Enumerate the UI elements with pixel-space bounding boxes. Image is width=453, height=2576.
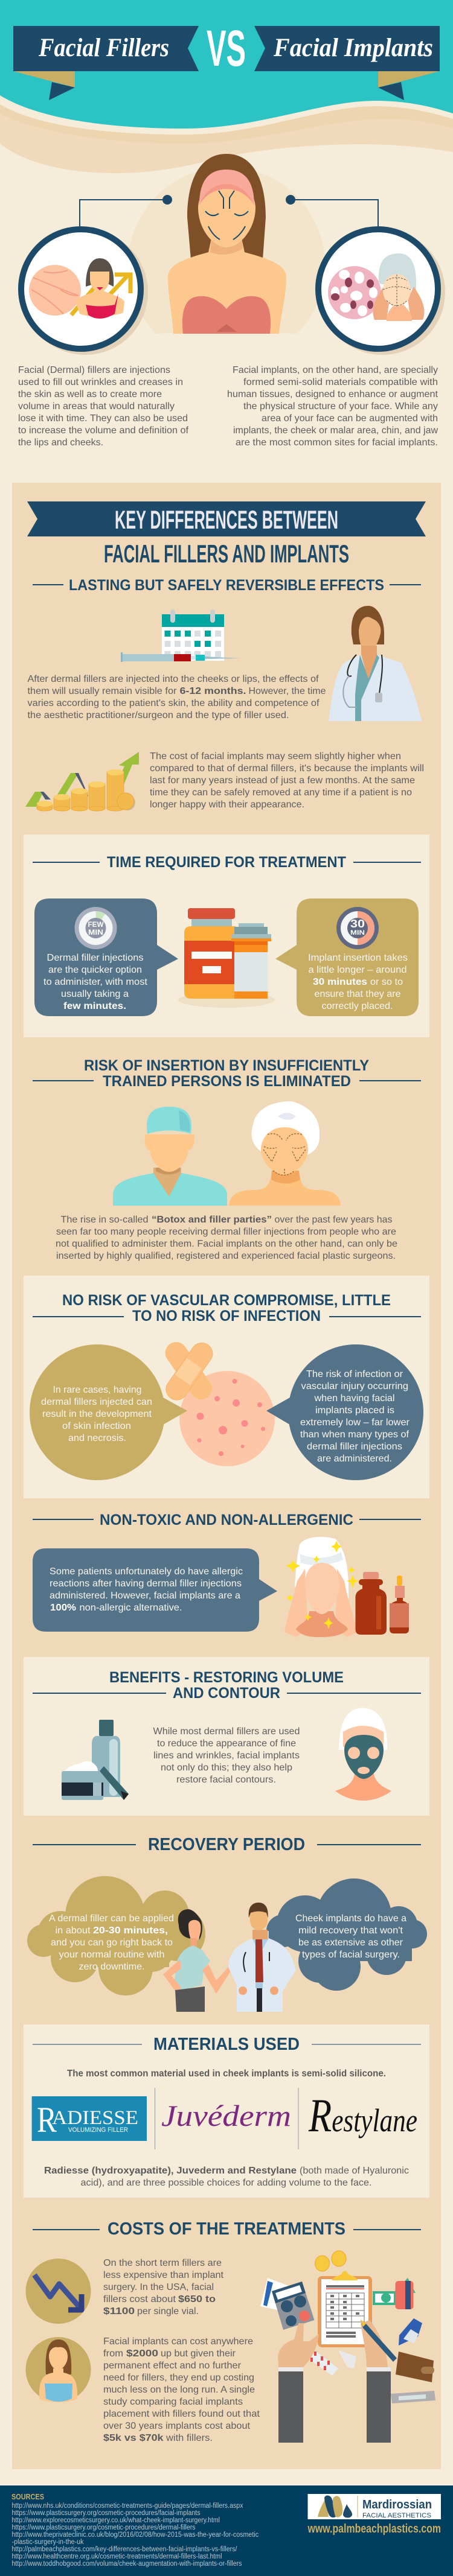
sources [11,2492,259,2568]
bubble: filler time: few minutes. [63,1001,126,1011]
illustration: surgeon [113,1107,227,1206]
heading: no risk: TO NO RISK OF INFECTION [132,1308,321,1325]
text: filler cost: surgery. In the USA, facial [103,2282,214,2292]
text: implant cost details: from [103,2349,123,2359]
icon: woman portrait [25,2337,91,2402]
sources: https://www.plasticsurgery.org/cosmetic-procedures/dermal-fillers [12,2524,196,2531]
text: facial fillers intro: the skin as well as to create more [18,389,162,399]
text: facial implants intro: formed semi-solid materials compatible with [243,377,438,387]
logo: mardirossian: Mardirossian [362,2498,432,2511]
cloud: filler recovery: zero downtime. [79,1962,145,1972]
bubble: implant infection risk: extremely low – far lower [300,1417,410,1428]
bubble: implant time: ensure that they are [314,989,401,999]
heading: non-toxic: NON-TOXIC AND NON-ALLERGENIC [100,1512,353,1528]
bubble: filler infection risk: result in the development [42,1409,152,1419]
text: benefits body: lines and wrinkles, facial implants [153,1751,300,1761]
bubble: implant infection risk: when having facial [313,1393,395,1404]
bubble: allergic reactions: reactions after having dermal filler injections [50,1579,242,1589]
banner: facial fillers [13,26,199,100]
icon: 30 min clock [336,907,379,949]
icon: syringe [121,652,240,662]
text: filler cost: $650 to [178,2294,216,2304]
logo: juvederm: Juvéderm [161,2099,291,2132]
text: implant cost details: $2000 [126,2349,158,2359]
cloud: filler recovery [27,1876,205,1996]
panel: vascular compromise and infection [24,1276,429,1498]
bubble: filler time: usually taking a [61,989,129,999]
heading: key differences [27,501,426,568]
logo: radiesse: ADIESSE [52,2107,138,2129]
text: implant cost: The cost of facial implants may seem slightly higher when [150,751,401,762]
sources: -plastic-surgery-in-the-uk [12,2539,84,2546]
panel: time required for treatment [24,835,429,1037]
bubble: implant time: 30 minutes [313,977,367,987]
text: filler cost: less expensive than implant [103,2270,224,2280]
icon: skincare products [62,1720,129,1800]
heading: risk of insertion [33,1057,421,1090]
text: benefits body [153,1726,300,1785]
heading: materials used: MATERIALS USED [153,2035,300,2054]
text: implant cost details: permanent effect and no further [103,2361,242,2371]
cloud: implant recovery: types of facial surgery. [302,1950,400,1960]
icon: 30 min clock: 30 [350,918,365,930]
footer [0,2485,453,2576]
illustration: nurse [163,1909,233,2012]
text: implant cost details: placement with fillers found out that [103,2409,260,2419]
bubble: filler infection risk: In rare cases, having [53,1385,141,1395]
text: facial fillers intro: lose it with time. They can also be used [18,413,188,424]
text: filler cost: fillers cost about [103,2294,176,2304]
text: filler cost [103,2258,224,2317]
cloud: implant recovery [266,1878,427,1991]
text: facial fillers intro [18,365,189,448]
bubble: implant infection risk: The risk of infection or [306,1369,403,1379]
text: botox and filler parties: inserted by highly qualified, registered and experienced facial plastic surgeons. [56,1251,396,1261]
text: products: acid), and are three possible choices for adding volume to the face. [81,2178,372,2188]
text: filler cost: On the short term fillers are [103,2258,222,2268]
icon: 30 min clock: MIN [350,929,365,937]
text: facial implants intro: implants, the cheek or malar area, chin, and jaw [233,425,438,436]
text: benefits body: While most dermal fillers are used [153,1726,300,1737]
text: silicone: The most common material used in cheek implants is semi-solid silicone. [67,2069,386,2079]
text: implant cost details: Facial implants can cost anywhere [103,2336,253,2347]
panel: materials used [24,2024,429,2198]
panel: benefits [24,1657,429,1816]
sources: http://www.nhs.uk/conditions/cosmetic-treatments-guide/pages/dermal-fillers.aspx [12,2502,243,2510]
cloud: filler recovery: and you can go right back to [51,1938,173,1948]
sources: https://www.plasticsurgery.org/cosmetic-procedures/facial-implants [12,2510,201,2517]
illustration: doctor with patient [228,1903,296,2012]
text: products [44,2166,409,2188]
icon: few min clock: FEW [88,920,104,929]
icon: few min clock [75,907,117,949]
cloud: implant recovery: Cheek implants do have a [295,1913,406,1924]
heading: risk of insertion: TRAINED PERSONS IS ELIMINATED [103,1073,351,1090]
illustration: doctor [329,606,422,721]
text: implant cost: time they can be safely removed at any time if a patient is no [150,787,412,798]
sources: http://palmbeachplastics.com/key-differences-between-facial-implants-vs-fillers/ [12,2546,237,2553]
bubble: implant time: correctly placed. [321,1001,393,1011]
cloud: implant recovery: be as extensive as other [298,1938,403,1948]
text: dermal filler duration: the aesthetic practitioner/surgeon and the type of filler used. [28,710,289,720]
heading: benefits: AND CONTOUR [173,1685,280,1702]
bubble: filler infection risk [30,1344,187,1480]
banner: facial implants: Facial Implants [273,34,433,62]
text: facial implants intro: human tissues, designed to enhance or augment [227,389,439,399]
text: benefits body: to reduce the appearance of fine [157,1738,296,1749]
bubble: allergic reactions: non-allergic alternative. [80,1603,182,1613]
logo: radiesse: R [37,2100,57,2140]
bubble: allergic reactions [33,1548,277,1632]
heading: no risk [33,1292,421,1325]
text: dermal filler duration [28,674,326,720]
icon: bandage [161,1338,217,1404]
bubble: implant infection risk: dermal filler injections [307,1442,402,1452]
bubble: filler time: Dermal filler injections [47,953,144,963]
central woman illustration [128,154,325,334]
text: facial implants intro: the physical structure of your face. While any [243,401,438,412]
text: botox and filler parties: The rise in so-called [60,1215,149,1225]
text: implant cost: compared to that of dermal fillers, it's because the implants will [150,763,424,774]
text: products: (both made of Hyaluronic [300,2166,409,2176]
connector: right [286,195,378,226]
bubble: filler infection risk: dermal fillers injected can [41,1397,152,1407]
icon: falling cost arrow [25,2259,91,2324]
cloud: filler recovery: your normal routine with [59,1950,164,1960]
illustration: woman with towel and bottles [284,1537,409,1637]
vs label: VS [207,20,246,77]
icon: implant circle [318,229,445,355]
text: facial implants intro [227,365,439,448]
text: facial fillers intro: volume in areas that would naturally [18,401,175,412]
text: botox and filler parties: over the past few years has [274,1215,393,1225]
heading: recovery period: RECOVERY PERIOD [148,1835,305,1854]
heading: risk of insertion: RISK OF INSERTION BY INSUFFICIENTLY [84,1057,369,1074]
icon: calendar [162,609,224,661]
header waves [0,0,453,173]
text: facial implants intro: are the most common sites for facial implants. [236,437,438,448]
cloud: filler recovery: 20-30 minutes, [93,1926,168,1936]
bubble: implant time: Implant insertion takes [308,953,408,963]
text: implant cost: longer happy with their appearance. [150,800,304,810]
bubble: filler infection risk: of skin infection [62,1421,131,1431]
text: implant cost details: need for fillers, they end up costing [103,2373,254,2383]
text: facial implants intro: Facial implants, on the other hand, are specially [233,365,438,375]
text: dermal filler duration: However, the time [249,686,326,696]
bubble: implant infection risk: are administered. [317,1454,392,1464]
bubble: filler time: are the quicker option [48,965,142,975]
bubble: allergic reactions: 100% [50,1603,76,1613]
text: implant cost details: with fillers. [165,2433,213,2443]
illustration: infected skin [179,1371,275,1466]
icon: medicine bottles [178,908,275,1008]
title banners [13,20,440,100]
text: dermal filler duration: them will usually remain visible for [28,686,177,696]
text: filler cost: per single vial. [137,2306,199,2317]
text: implant cost details: study comparing facial implants [103,2397,243,2407]
bubble: implant time: or so to [370,977,403,987]
heading: benefits: BENEFITS - RESTORING VOLUME [109,1669,344,1686]
text: implant cost details: over 30 years implants cost about [103,2421,251,2431]
bubble: implant infection risk: than when many types of [300,1430,410,1440]
illustration: face mask woman [335,1708,391,1801]
panel: key differences background [12,483,441,2469]
text: facial implants intro: area of your face can be augmented with [262,413,438,424]
heading: benefits [33,1669,421,1702]
sources: http://www.explorecosmeticsurgery.co.uk/what-cheek-implant-surgery.html [12,2517,220,2524]
text: facial fillers intro: used to fill out wrinkles and creases in [18,377,183,387]
banner: facial implants [254,26,440,100]
sources: http://www.theprivateclinic.co.uk/blog/2016/02/08/how-2015-was-the-year-for-cosmetic [12,2531,259,2539]
cloud: filler recovery: in about [56,1926,91,1936]
bubble: implant time [275,898,419,1016]
bubble: implant infection risk: implants placed is [315,1405,394,1416]
heading: time required: TIME REQUIRED FOR TREATMENT [107,854,346,871]
heading: lasting effects: LASTING BUT SAFELY REVERSIBLE EFFECTS [69,577,384,594]
logo: mardirossian: FACIAL AESTHETICS [362,2512,431,2519]
text: implant cost details: up but given their [161,2349,236,2359]
sources: http://www.toddhobgood.com/voluma/cheek-augmentation-with-implants-or-fillers [12,2560,242,2568]
bubble: implant infection risk [266,1344,423,1480]
logo: mardirossian [308,2494,441,2519]
text: filler cost: $1100 [103,2306,135,2317]
bubble: filler infection risk: and necrosis. [68,1433,126,1443]
bubble: implant time: a little longer – around [308,965,407,975]
heading: costs: COSTS OF THE TREATMENTS [108,2219,345,2239]
text: products: Radiesse (hydroxyapatite), Juvederm and Restylane [44,2166,297,2176]
text: facial fillers intro: the lips and cheeks. [18,437,103,448]
text: facial fillers intro: to increase the volume and definition of [18,425,189,436]
icon: coins and growth arrow [25,752,139,811]
illustration: budget clipboard and hands [260,2251,435,2443]
bubble: filler time: to administer, with most [43,977,148,987]
sources: SOURCES [11,2492,44,2501]
text: implant cost details: $5k vs $70k [103,2433,164,2443]
logo: restylane: Restylane [308,2089,417,2142]
bubble: allergic reactions: Some patients unfortunately do have allergic [50,1566,243,1577]
logo: radiesse [32,2096,147,2141]
text: dermal filler duration: After dermal fillers are injected into the cheeks or lips, the effects of [28,674,319,684]
connector: left [80,195,172,226]
text: facial fillers intro: Facial (Dermal) fillers are injections [18,365,170,375]
text: botox and filler parties [56,1215,397,1261]
banner: facial fillers: Facial Fillers [38,34,169,62]
icon: few min clock: MIN [88,928,103,937]
text: dermal filler duration: varies according to the patient's skin, the ability and competence of [28,698,320,708]
bubble: implant infection risk: vascular injury occurring [301,1381,408,1391]
cloud: filler recovery: A dermal filler can be applied [49,1913,174,1924]
bubble: allergic reactions: administered. However, facial implants are a [50,1591,240,1601]
bubble: filler time [34,898,178,1016]
logo: radiesse: VOLUMIZING FILLER [68,2126,128,2134]
icon: filler circle [21,229,148,355]
text: benefits body: not only do this; they also help [161,1763,292,1773]
text: benefits body: restore facial contours. [176,1775,276,1785]
text: dermal filler duration: 6-12 months. [180,686,246,696]
sources: http://www.healthcentre.org.uk/cosmetic-treatments/dermal-fillers-last.html [12,2553,222,2560]
illustration: patient with marked face [229,1101,341,1206]
text: implant cost details [103,2336,260,2443]
text: implant cost: last for many years instead of just a few months. At the same [150,775,415,786]
heading: no risk: NO RISK OF VASCULAR COMPROMISE, LITTLE [62,1292,391,1309]
text: implant cost [150,751,424,810]
text: implant cost details: much less on the long run. A single [103,2385,255,2395]
text: botox and filler parties: seen far too many people receiving dermal filler injections from people who are [56,1227,396,1237]
text: botox and filler parties: “Botox and filler parties” [152,1215,272,1225]
text: botox and filler parties: not qualified to administer them. Facial implants on the other hand, can only be [56,1239,397,1249]
cloud: implant recovery: mild recovery that won't [298,1926,403,1936]
